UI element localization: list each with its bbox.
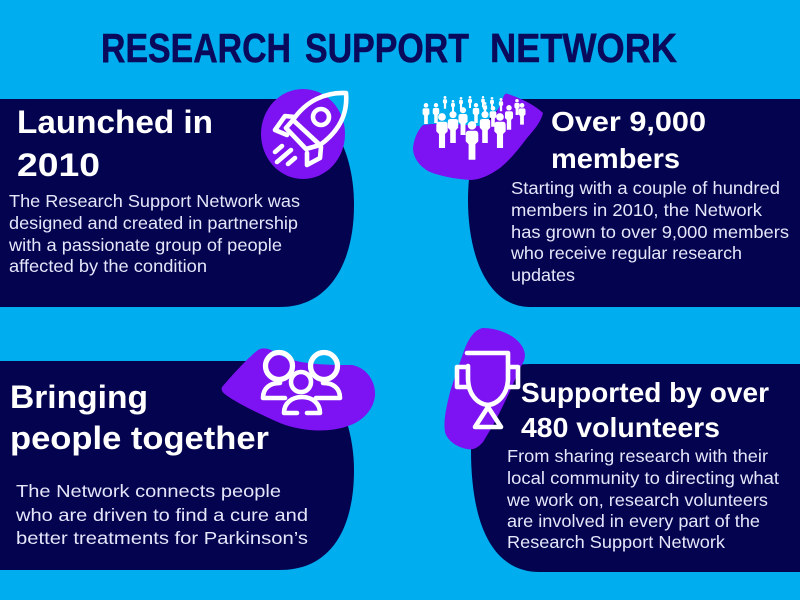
- body text: [15, 481, 308, 548]
- panel: launched in 2010: [0, 89, 354, 307]
- body text: affected by the condition: [9, 256, 207, 276]
- panel: over 9,000 members: [413, 94, 800, 307]
- panel: supported by volunteers: [444, 328, 800, 572]
- body text: local community to directing what: [507, 468, 779, 488]
- blob: rocket background: [261, 89, 345, 179]
- body text: The Research Support Network was: [9, 191, 300, 211]
- blob: group background: [222, 348, 375, 430]
- panel shape: [468, 99, 800, 307]
- body text: better treatments for Parkinson’s: [16, 528, 308, 548]
- panel shape: [471, 364, 800, 572]
- heading: members: [551, 143, 680, 174]
- title: NETWORK: [490, 25, 677, 71]
- body text: members in 2010, the Network: [511, 200, 762, 220]
- title: [101, 25, 677, 71]
- blob: trophy background: [444, 328, 525, 449]
- body text: The Network connects people: [16, 481, 281, 501]
- heading: 480 volunteers: [521, 412, 720, 443]
- body text: who are driven to find a cure and: [15, 505, 308, 525]
- title: RESEARCH: [101, 25, 291, 71]
- body text: designed and created in partnership: [9, 213, 298, 233]
- body text: who receive regular research: [510, 243, 742, 263]
- title: SUPPORT: [305, 25, 469, 71]
- icon: group of people: [263, 352, 340, 413]
- heading: Launched in: [17, 104, 213, 140]
- icon: crowd of people: [423, 96, 526, 160]
- icon: rocket: [275, 93, 346, 165]
- heading: Bringing: [10, 379, 148, 415]
- heading: [10, 379, 269, 456]
- body text: [506, 446, 779, 552]
- panel shape: [0, 99, 354, 307]
- body text: are involved in every part of the: [507, 511, 760, 531]
- body text: From sharing research with their: [507, 446, 768, 466]
- heading: 2010: [17, 147, 100, 183]
- body text: Starting with a couple of hundred: [511, 178, 780, 198]
- body text: updates: [511, 265, 575, 285]
- panel shape: [0, 361, 354, 570]
- heading: [551, 106, 706, 174]
- body text: Research Support Network: [507, 532, 725, 552]
- heading: [521, 377, 769, 443]
- body text: we work on, research volunteers: [506, 490, 768, 510]
- body text: [510, 178, 789, 285]
- panel: bringing people together: [0, 348, 375, 570]
- heading: [17, 104, 213, 183]
- heading: Over 9,000: [551, 106, 706, 137]
- body text: has grown to over 9,000 members: [511, 222, 789, 242]
- body text: with a passionate group of people: [8, 235, 282, 255]
- heading: Supported by over: [521, 377, 769, 408]
- blob: crowd background: [413, 94, 543, 180]
- heading: people together: [10, 420, 269, 456]
- body text: [8, 191, 300, 276]
- icon: trophy: [457, 353, 518, 427]
